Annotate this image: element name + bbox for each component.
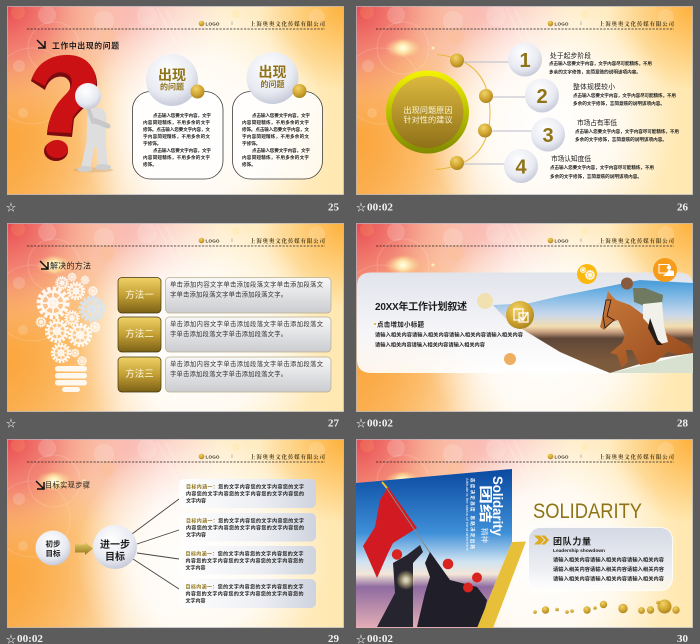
goal box 1: 内容您的文字内容您的文字内容您的文字内容您的 bbox=[186, 490, 304, 498]
bubble: 出现的问题 1 bbox=[146, 54, 198, 106]
panel: problem box 2 bbox=[232, 52, 322, 179]
poster vertical text bbox=[465, 476, 506, 551]
arrow: gold bbox=[75, 542, 93, 555]
problem text 2: 修饰。 bbox=[242, 161, 256, 168]
slide 27: solutions bbox=[0, 222, 344, 430]
problem text 2: 内容简短精炼，不用多余的文字 bbox=[242, 119, 309, 126]
team strength text: Leadership showdown bbox=[553, 548, 605, 553]
central circle bbox=[386, 70, 469, 154]
icon: arrow bbox=[36, 481, 44, 489]
problem text 2 bbox=[242, 112, 310, 168]
slide 26 background bbox=[343, 5, 693, 195]
goal box 4: 内容您的文字内容您的文字内容您的文字内容您的 bbox=[186, 590, 304, 598]
problem text 1: 字内容简短精炼，不用多余的文 bbox=[143, 133, 210, 140]
team strength text: 请输入相关内容请输入相关内容请输入相关内容 bbox=[553, 565, 665, 573]
item 4: 多余的文字修饰，言简意赅的说明该项内容。 bbox=[550, 173, 642, 180]
bubble: 出现的问题 1: 的问题 bbox=[160, 82, 184, 92]
decorative pale dots bbox=[477, 293, 516, 365]
footer slide 25 bbox=[6, 202, 339, 214]
footer slide 27: ☆ bbox=[6, 418, 16, 430]
method 3: 单击添加内容文字单击添加段落文字单击添加段落文 bbox=[170, 359, 324, 368]
item 4 bbox=[504, 149, 654, 183]
icon: double chevron bbox=[534, 536, 549, 544]
slide 25: problems at work bbox=[0, 5, 344, 214]
goal box 3: 文字内容 bbox=[186, 564, 206, 572]
heading: 工作中出现的问题: 工作中出现的问题 bbox=[52, 40, 119, 50]
slide 27 background bbox=[0, 222, 344, 412]
method 1 bbox=[118, 278, 331, 313]
team strength text bbox=[553, 536, 665, 582]
footer slide 25: 25 bbox=[328, 202, 339, 214]
photo: jumping horse bbox=[493, 278, 693, 373]
goal box 4: 目标内涵一：您的文字内容您的文字内容您的文字 bbox=[186, 584, 304, 590]
problem text 2: 字修饰。 bbox=[242, 140, 260, 147]
goal box 1: 目标内涵一：您的文字内容您的文字内容您的文字 bbox=[186, 484, 304, 490]
footer slide 28 bbox=[356, 418, 688, 430]
team strength text: 请输入相关内容请输入相关内容请输入相关内容 bbox=[553, 574, 665, 582]
central circle: 出现问题原因 bbox=[403, 105, 453, 115]
goal box 1 bbox=[179, 479, 316, 508]
footer slide 27: 27 bbox=[328, 418, 339, 430]
item 2 bbox=[525, 78, 676, 112]
footer slide 27 bbox=[6, 418, 339, 430]
circle: 初步目标 bbox=[36, 530, 70, 566]
central circle: 针对性的建议 bbox=[403, 114, 453, 124]
circle: 初步目标: 目标 bbox=[46, 548, 61, 558]
poster vertical text: 团结 bbox=[478, 485, 493, 523]
method 1: 单击添加内容文字单击添加段落文字单击添加段落文 bbox=[170, 280, 324, 288]
problem text 1: 点击输入您要文字内容，文字 bbox=[153, 112, 211, 119]
goal box 2: 内容您的文字内容您的文字内容您的文字内容您的 bbox=[186, 524, 304, 532]
bubble: 出现的问题 2: 出现 bbox=[258, 64, 286, 80]
body text: 请输入相关内容请输入相关内容请输入相关内容请输入相关内容 bbox=[375, 330, 524, 338]
item 2: 点击输入您要文字内容，文字内容尽可能精炼，不用 bbox=[573, 92, 676, 99]
item 1: 1 bbox=[519, 50, 531, 72]
footer slide 26 bbox=[356, 202, 688, 214]
body text: 请输入相关内容请输入相关内容请输入相关内容 bbox=[375, 340, 486, 348]
decorative gold balls bbox=[533, 600, 680, 614]
connector lines bbox=[457, 62, 532, 164]
item 3: 3 bbox=[542, 125, 554, 147]
footer slide 25: ☆ bbox=[6, 202, 16, 214]
panel: white banner bbox=[357, 272, 693, 373]
goal box 4: 文字内容 bbox=[186, 598, 206, 604]
problem text 1 bbox=[143, 112, 211, 168]
goal box 3 bbox=[179, 546, 316, 574]
problem text 1: 修饰。点击输入您要文字内容，文 bbox=[143, 126, 210, 133]
problem text 2: 修饰。点击输入您要文字内容，文 bbox=[242, 126, 309, 133]
slide 25 background bbox=[0, 5, 344, 195]
problem text 1: 点击输入您要文字内容，文字 bbox=[153, 147, 211, 154]
poster vertical text: 态度决定高度 思路决定出路 bbox=[469, 478, 476, 550]
footer slide 30 bbox=[356, 634, 688, 644]
method 1: 方法一 bbox=[125, 289, 154, 301]
footer slide 26: 26 bbox=[677, 202, 688, 214]
connector arc bbox=[436, 54, 490, 170]
problem text 2: 内容简短精炼，不用多余的文字 bbox=[242, 154, 309, 161]
panel: problem box 1 bbox=[132, 54, 223, 179]
problem text 1: 修饰。 bbox=[143, 161, 157, 168]
heading: 解决的方法: 解决的方法 bbox=[50, 260, 91, 270]
panel: team strength bbox=[528, 528, 672, 590]
item 3: 多余的文字修饰，言简意赅的说明该项内容。 bbox=[575, 136, 667, 143]
icon: edit badge bbox=[506, 301, 534, 329]
icon: arrow bbox=[37, 40, 45, 48]
method 1: 字单击添加段落文字单击添加段落文字。 bbox=[170, 290, 287, 298]
title: SOLIDARITY: SOLIDARITY bbox=[533, 499, 642, 523]
item 1: 点击输入您要文字内容，文字内容尽可能精炼，不用 bbox=[549, 60, 652, 67]
icon: arrow bbox=[40, 261, 48, 269]
item 2: 整体规模较小 bbox=[573, 82, 615, 91]
problem text 1: 字修饰。 bbox=[143, 140, 161, 147]
slide 29: goal steps bbox=[0, 438, 344, 644]
goal box 1: 文字内容 bbox=[186, 498, 206, 504]
slide 28: 20XX work plan bbox=[343, 222, 693, 430]
item 1: 处于起步阶段 bbox=[550, 51, 591, 60]
item 2: 2 bbox=[536, 86, 548, 108]
item 3 bbox=[531, 118, 679, 152]
method 3 bbox=[118, 357, 331, 392]
team strength text: 团队力量 bbox=[553, 536, 591, 546]
slide 30: solidarity bbox=[343, 438, 693, 644]
icon: gold ball 1 bbox=[190, 84, 204, 98]
footer slide 28: 28 bbox=[677, 418, 688, 430]
item 3: 市场占有率低 bbox=[577, 118, 617, 127]
circle: 进一步目标: 进一步 bbox=[100, 538, 130, 551]
footer slide 29 bbox=[6, 634, 339, 644]
slide 29 background bbox=[0, 438, 344, 628]
bubble: 出现的问题 2: 的问题 bbox=[260, 79, 284, 89]
method 2 bbox=[118, 317, 331, 352]
poster vertical text: Solidarity bbox=[490, 476, 506, 536]
circle: 初步目标: 初步 bbox=[46, 538, 61, 548]
gold nodes bbox=[450, 54, 493, 170]
icon: presenter badge bbox=[653, 258, 677, 282]
footer slide 26: ☆ bbox=[356, 202, 366, 214]
method 3: 方法三 bbox=[125, 368, 154, 380]
poster vertical text: 精神 bbox=[480, 528, 490, 543]
footer slide 28: 00:02 bbox=[367, 418, 393, 430]
connector lines bbox=[132, 499, 179, 589]
slide 30 background bbox=[343, 438, 693, 628]
method 3: 字单击添加段落文字单击添加段落文字。 bbox=[170, 369, 287, 378]
bubble: 出现的问题 1: 出现 bbox=[158, 67, 186, 83]
poster vertical text: Attitude is the status of mind determine bbox=[465, 478, 469, 551]
problem text 1: 内容简短精炼，不用多余的文字 bbox=[143, 119, 210, 126]
circle: 进一步目标 bbox=[93, 525, 137, 569]
item 4: 4 bbox=[515, 156, 527, 178]
icon: gold ball 2 bbox=[292, 84, 306, 98]
icon: red question mark bbox=[31, 55, 97, 161]
item 4: 点击输入您要文字内容，文字内容尽可能精炼，不用 bbox=[550, 164, 654, 171]
item 1 bbox=[508, 42, 652, 76]
body text bbox=[375, 330, 524, 348]
photo poster: team raising flag bbox=[356, 469, 512, 628]
circle: 进一步目标: 目标 bbox=[105, 550, 125, 563]
bubble: 出现的问题 2 bbox=[246, 52, 298, 104]
goal box 2: 目标内涵一：您的文字内容您的文字内容您的文字 bbox=[186, 518, 304, 524]
problem text 1: 内容简短精炼，不用多余的文字 bbox=[143, 154, 210, 161]
problem text 2: 点击输入您要文字内容，文字 bbox=[252, 112, 310, 119]
goal box 2: 文字内容 bbox=[186, 532, 206, 538]
yellow stripe bbox=[477, 542, 526, 628]
footer slide 26: 00:02 bbox=[367, 202, 393, 214]
title: 20XX年工作计划叙述: 20XX年工作计划叙述 bbox=[375, 300, 467, 313]
item 2: 多余的文字修饰，言简意赅的说明该项内容。 bbox=[573, 100, 665, 107]
method 2: 字单击添加段落文字单击添加段落文字。 bbox=[170, 329, 287, 338]
slide 26: four suggestions bbox=[343, 5, 693, 214]
icon: gear lightbulb bbox=[36, 273, 103, 392]
problem text 2: 字内容简短精炼，不用多余的文 bbox=[242, 133, 309, 140]
goal box 3: 目标内涵一：您的文字内容您的文字内容您的文字 bbox=[186, 550, 304, 558]
item 4: 市场认知度低 bbox=[551, 154, 591, 163]
item 3: 点击输入您要文字内容，文字内容尽可能精炼，不用 bbox=[575, 128, 679, 135]
item 1: 多余的文字修饰，言简意赅的说明该项内容。 bbox=[549, 68, 641, 76]
goal box 4 bbox=[179, 579, 316, 608]
method 2: 方法二 bbox=[125, 328, 154, 340]
goal box 3: 内容您的文字内容您的文字内容您的文字内容您的 bbox=[186, 558, 304, 564]
team strength text: 请输入相关内容请输入相关内容请输入相关内容 bbox=[553, 556, 665, 564]
heading: 目标实现步骤: 目标实现步骤 bbox=[45, 480, 90, 490]
footer slide 28: ☆ bbox=[356, 418, 366, 430]
goal box 2 bbox=[179, 513, 316, 542]
icon: gears badge bbox=[577, 264, 597, 284]
subheading with bullet: 点击增加小标题 bbox=[377, 320, 424, 328]
icon: thinking white figure bbox=[73, 83, 113, 172]
method 2: 单击添加内容文字单击添加段落文字单击添加段落文 bbox=[170, 319, 324, 328]
slide 28 background bbox=[343, 222, 693, 412]
problem text 2: 点击输入您要文字内容，文字 bbox=[252, 147, 310, 154]
